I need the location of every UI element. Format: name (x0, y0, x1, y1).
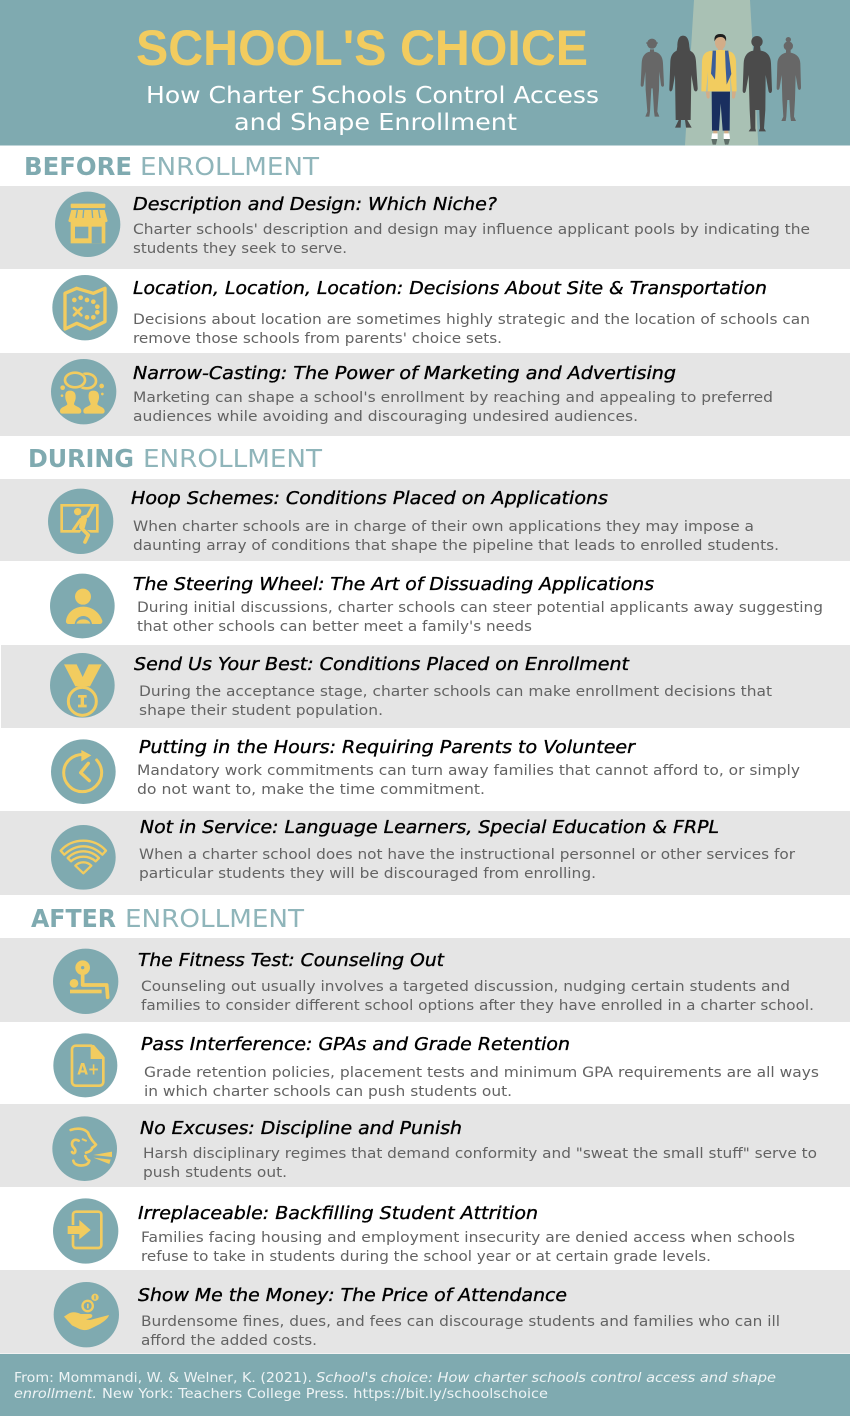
description: Decisions about location are sometimes highly strategic and the location of schools can (133, 312, 810, 328)
description (143, 1146, 817, 1181)
panel: description and design (0, 186, 850, 269)
icon: figure climbing through window (48, 489, 113, 554)
description: Charter schools' description and design may influence applicant pools by indicating the (133, 222, 810, 238)
heading: The Steering Wheel: The Art of Dissuading Applications (133, 575, 654, 595)
footer citation: New York: Teachers College Press. https://bit.ly/schoolschoice (102, 1386, 548, 1402)
icon: medal (50, 653, 115, 718)
description: Families facing housing and employment insecurity are denied access when schools (141, 1230, 795, 1246)
panel: no excuses (0, 1104, 850, 1187)
subtitle (146, 83, 599, 136)
description (139, 684, 772, 719)
footer citation (0, 1354, 850, 1416)
icon: A+ document (53, 1033, 117, 1097)
section heading: after enrollment: AFTER (31, 904, 116, 933)
description: Harsh disciplinary regimes that demand conformity and "sweat the small stuff" serve to (143, 1146, 817, 1162)
icon: clock with arrow (51, 739, 116, 804)
heading: Description and Design: Which Niche? (133, 195, 497, 215)
description: audiences while avoiding and discouraging undesired audiences. (133, 409, 638, 425)
description: families to consider different school options after they have enrolled in a charter school. (141, 998, 814, 1014)
section heading: during enrollment (28, 444, 323, 473)
description (141, 1230, 795, 1265)
icon: treasure map (52, 275, 118, 340)
description: do not want to, make the time commitment. (137, 782, 485, 798)
icon: bench press (53, 949, 118, 1014)
section heading: after enrollment (31, 904, 305, 933)
footer citation: enrollment. (14, 1386, 97, 1402)
description (133, 312, 810, 347)
icon: storefront (55, 192, 120, 257)
heading: Hoop Schemes: Conditions Placed on Applications (131, 489, 608, 509)
description: During the acceptance stage, charter schools can make enrollment decisions that (139, 684, 772, 700)
description: When a charter school does not have the instructional personnel or other services for (139, 847, 795, 863)
illustration: student in spotlight among silhouettes (641, 0, 801, 145)
title: SCHOOL'S CHOICE (136, 20, 588, 76)
heading: The Fitness Test: Counseling Out (138, 951, 445, 971)
description: afford the added costs. (141, 1333, 317, 1349)
description (133, 390, 773, 425)
heading: Not in Service: Language Learners, Special Education & FRPL (140, 818, 719, 838)
section heading: before enrollment: BEFORE (24, 152, 132, 181)
icon: shouting face (52, 1116, 117, 1181)
section heading: after enrollment: ENROLLMENT (125, 904, 305, 933)
panel: putting in the hours (0, 728, 850, 811)
panel: pass interference (0, 1022, 850, 1104)
subtitle: How Charter Schools Control Access (146, 83, 599, 109)
description (137, 600, 823, 635)
description: remove those schools from parents' choice sets. (133, 331, 502, 347)
heading: Irreplaceable: Backfilling Student Attrition (138, 1204, 538, 1224)
panel: location (0, 269, 850, 353)
description (141, 1314, 780, 1349)
heading: Narrow-Casting: The Power of Marketing and Advertising (133, 364, 676, 384)
panel: not in service (0, 811, 850, 895)
description: Counseling out usually involves a targeted discussion, nudging certain students and (141, 979, 790, 995)
panel: hoop schemes (0, 479, 850, 561)
heading: Pass Interference: GPAs and Grade Retention (141, 1035, 570, 1055)
panel: narrow-casting (0, 353, 850, 436)
icon: person at steering wheel (50, 574, 115, 638)
icon: A+ document: A+ (77, 1059, 99, 1078)
description: refuse to take in students during the school year or at certain grade levels. (141, 1249, 711, 1265)
icon: two people with linked rings (51, 359, 116, 424)
heading: Show Me the Money: The Price of Attendance (138, 1286, 567, 1306)
header banner (0, 0, 850, 146)
icon: hand holding coins (54, 1282, 119, 1347)
description: students they seek to serve. (133, 241, 347, 257)
heading: Location, Location, Location: Decisions About Site & Transportation (133, 279, 767, 299)
section heading: before enrollment (24, 152, 320, 181)
footer citation: School's choice: How charter schools control access and shape (316, 1370, 776, 1386)
icon: wifi signal (51, 825, 116, 890)
panel: irreplaceable (0, 1187, 850, 1270)
panel: show me the money (0, 1270, 850, 1354)
description (141, 979, 814, 1014)
panel: steering wheel (0, 561, 850, 645)
section heading: during enrollment: ENROLLMENT (143, 444, 323, 473)
panel: send us your best (1, 645, 850, 728)
footer citation: From: Mommandi, W. & Welner, K. (2021). (14, 1370, 312, 1386)
description: During initial discussions, charter schools can steer potential applicants away suggesting (137, 600, 823, 616)
description (139, 847, 795, 882)
description: that other schools can better meet a family's needs (137, 619, 532, 635)
description (133, 222, 810, 257)
description: in which charter schools can push students out. (144, 1084, 512, 1100)
panel: fitness test (0, 938, 850, 1022)
description: particular students they will be discouraged from enrolling. (139, 866, 596, 882)
heading: Send Us Your Best: Conditions Placed on Enrollment (134, 655, 630, 675)
description: push students out. (143, 1165, 287, 1181)
description (133, 519, 779, 554)
section heading: during enrollment: DURING (28, 444, 134, 473)
description: Marketing can shape a school's enrollment by reaching and appealing to preferred (133, 390, 773, 406)
description: When charter schools are in charge of their own applications they may impose a (133, 519, 754, 535)
heading: No Excuses: Discipline and Punish (140, 1119, 462, 1139)
description: Grade retention policies, placement tests and minimum GPA requirements are all ways (144, 1065, 819, 1081)
description: Mandatory work commitments can turn away families that cannot afford to, or simply (137, 763, 800, 779)
description: shape their student population. (139, 703, 383, 719)
section heading: before enrollment: ENROLLMENT (140, 152, 320, 181)
description: daunting array of conditions that shape the pipeline that leads to enrolled students. (133, 538, 779, 554)
subtitle: and Shape Enrollment (234, 110, 517, 136)
heading: Putting in the Hours: Requiring Parents to Volunteer (139, 738, 637, 758)
description: Burdensome fines, dues, and fees can discourage students and families who can ill (141, 1314, 780, 1330)
description (137, 763, 800, 798)
description (144, 1065, 819, 1100)
icon: door with entry arrow (53, 1198, 118, 1264)
